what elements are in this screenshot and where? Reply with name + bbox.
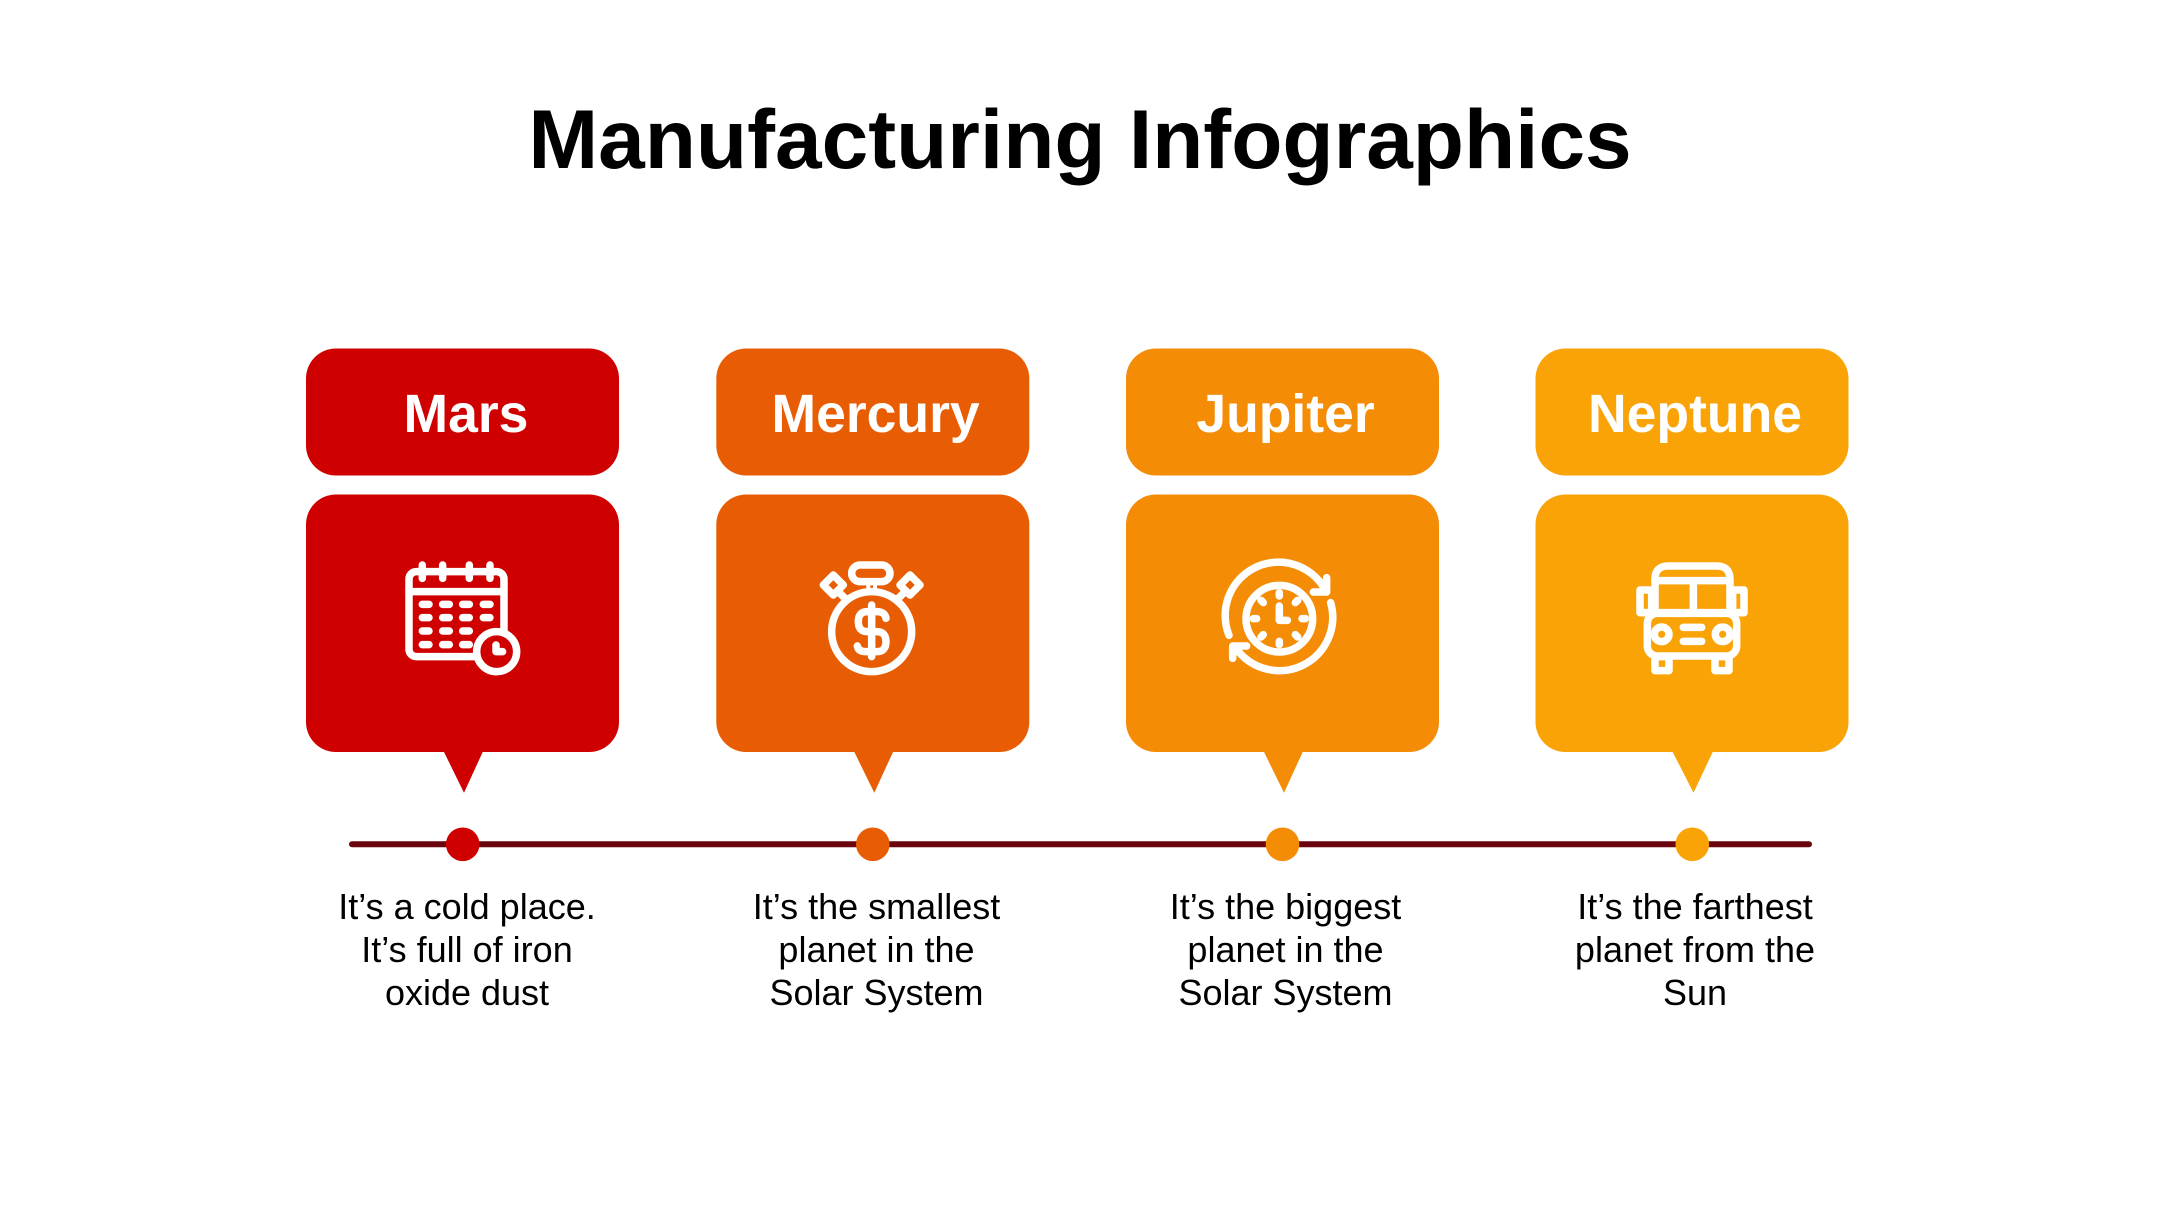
header: Neptune: Neptune	[1588, 385, 1802, 444]
description: Mercury	[753, 886, 1000, 1013]
description: Mars	[338, 886, 596, 1013]
callout: Jupiter	[1126, 494, 1439, 793]
panel: Mercury	[716, 348, 1029, 1013]
header: Mercury	[716, 348, 1029, 476]
description: Neptune: It’s the farthest	[1577, 886, 1813, 927]
description: Neptune: Sun	[1663, 972, 1727, 1013]
description: Mars: It’s full of iron	[361, 929, 573, 970]
panel: Jupiter	[1126, 348, 1439, 1013]
description: Mercury: Solar System	[769, 972, 984, 1013]
description: Neptune: planet from the	[1575, 929, 1815, 970]
description: Jupiter: planet in the	[1187, 929, 1384, 970]
header: Neptune	[1536, 348, 1848, 476]
description: Jupiter: It’s the biggest	[1170, 886, 1401, 927]
panel: Neptune	[1536, 348, 1848, 1013]
description: Jupiter	[1170, 886, 1401, 1013]
icon: bus	[1640, 566, 1744, 671]
callout: Neptune	[1536, 494, 1848, 793]
icon: calendar with clock	[409, 565, 517, 672]
description: Mercury: It’s the smallest	[753, 886, 1000, 927]
description: Neptune	[1575, 886, 1815, 1013]
header: Jupiter	[1126, 348, 1439, 476]
header: Mars	[306, 348, 619, 476]
header: Mercury: Mercury	[772, 385, 980, 444]
callout: Mercury	[716, 494, 1029, 793]
header: Jupiter: Jupiter	[1196, 385, 1375, 444]
timeline	[352, 828, 1809, 861]
icon: clock with circular arrows	[1225, 562, 1333, 671]
panel: Mars	[306, 348, 619, 1013]
callout: Mars	[306, 494, 619, 793]
header: Mars: Mars	[404, 385, 528, 444]
description: Mercury: planet in the	[778, 929, 975, 970]
description: Mars: It’s a cold place.	[338, 886, 596, 927]
description: Jupiter: Solar System	[1178, 972, 1393, 1013]
description: Mars: oxide dust	[385, 972, 549, 1013]
icon: stopwatch with dollar	[823, 565, 920, 672]
title: Manufacturing Infographics	[528, 92, 1632, 186]
